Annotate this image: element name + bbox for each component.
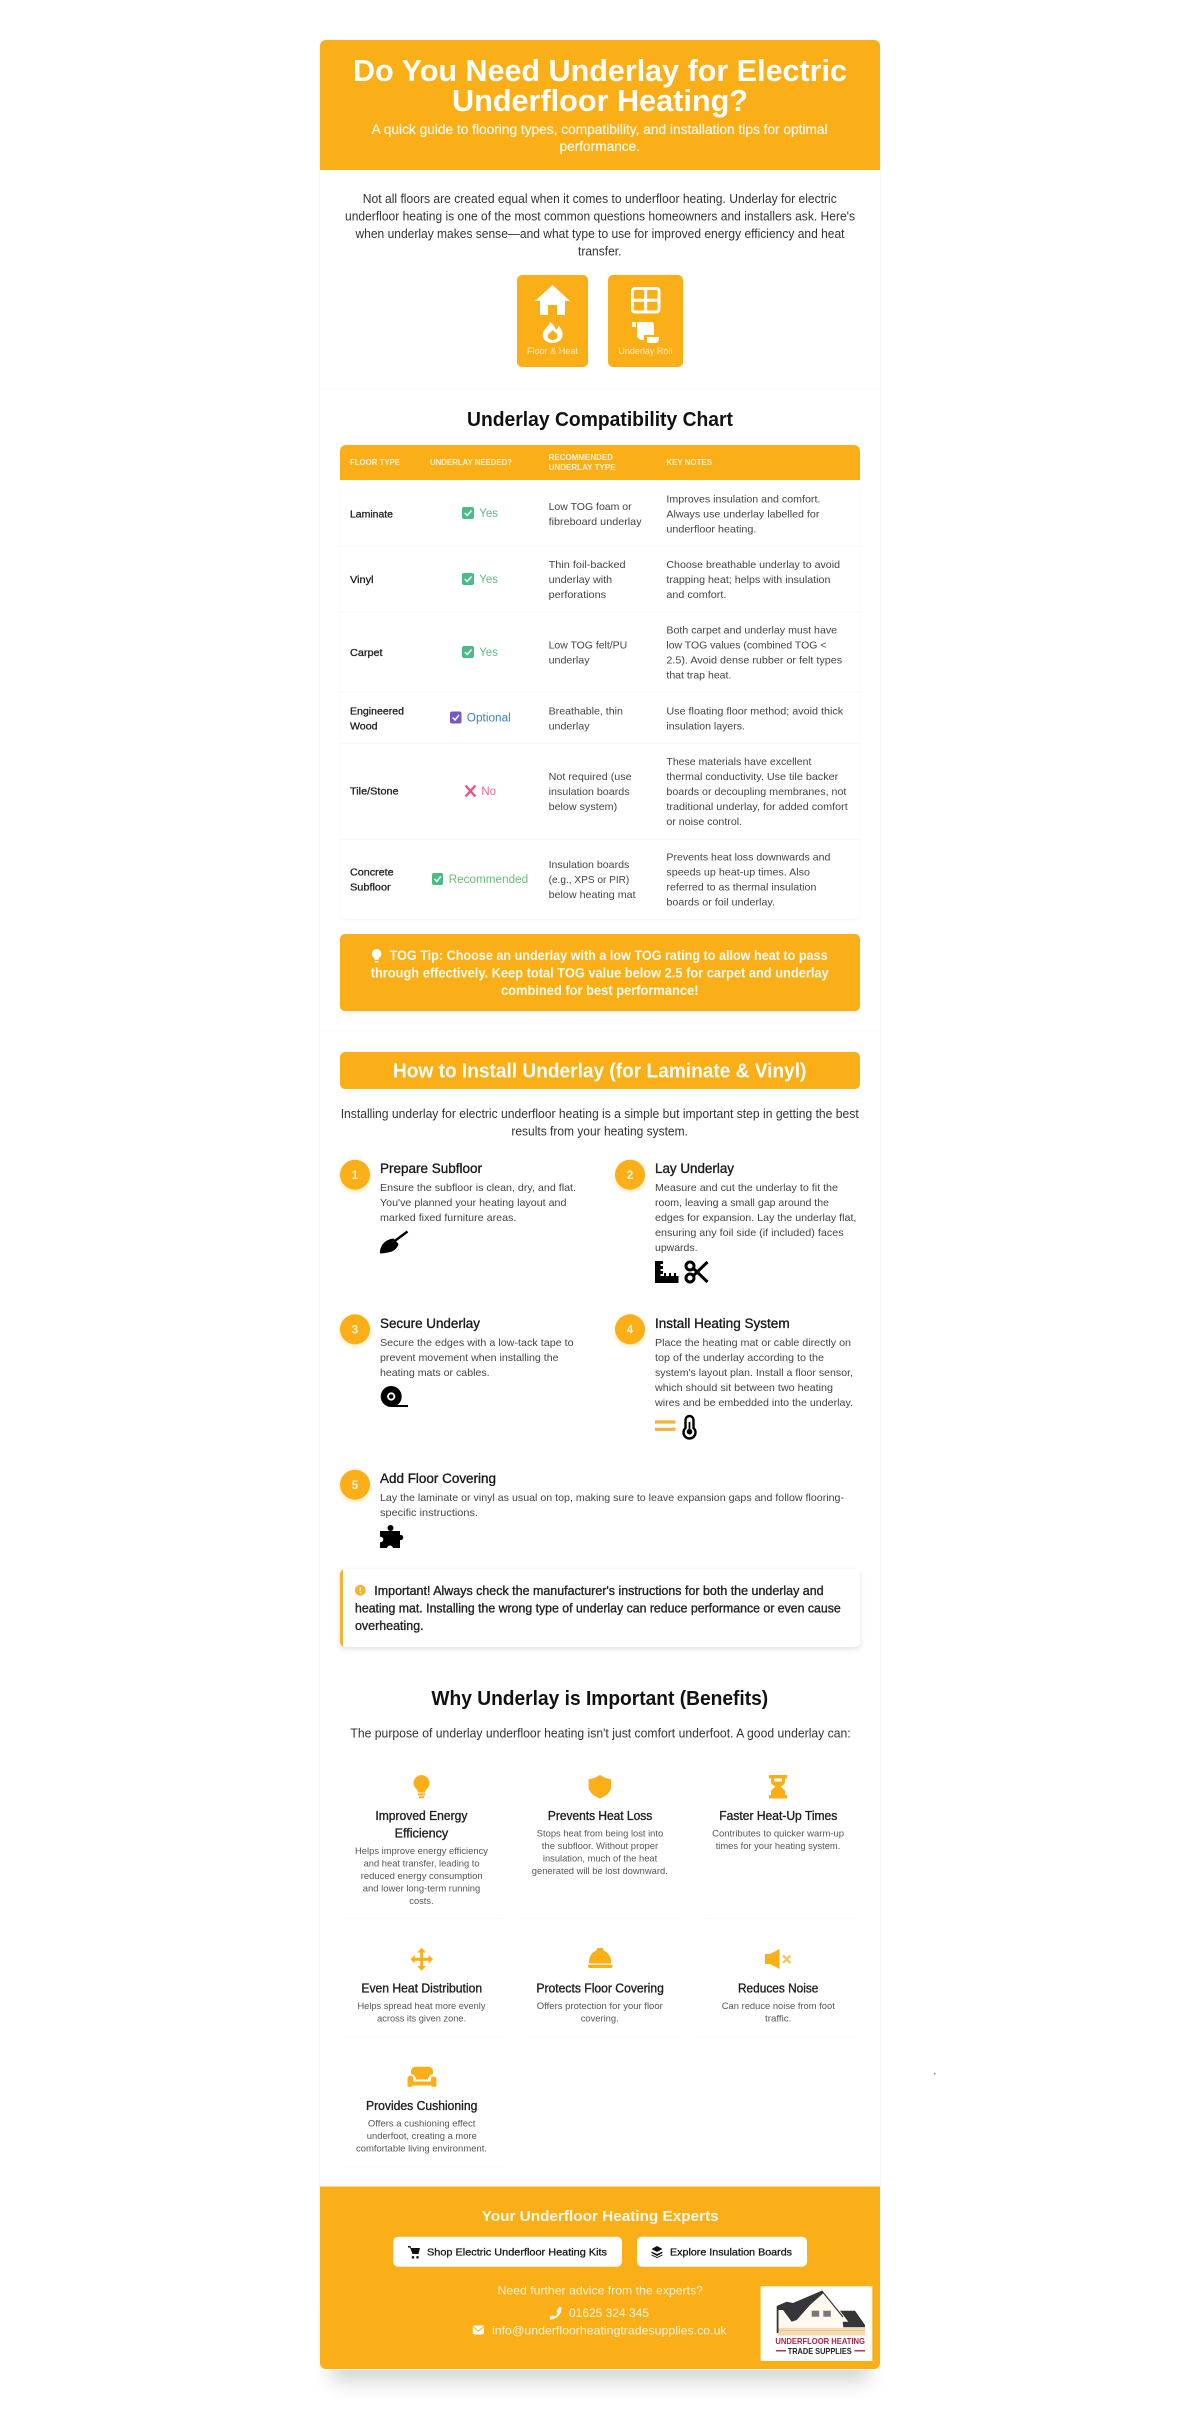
button: shop kits: Shop Electric Underfloor Heating Kits bbox=[427, 2246, 607, 2258]
button: shop kits bbox=[393, 2237, 622, 2267]
row: vinyl: Yes bbox=[479, 574, 498, 586]
icon: cart bbox=[408, 2246, 420, 2259]
row: laminate: Always use underlay labelled for bbox=[666, 509, 820, 521]
step 2: lay underlay bbox=[615, 1160, 856, 1283]
table header: FLOOR TYPE bbox=[350, 458, 401, 467]
step 2: lay underlay: Measure and cut the underlay to fit the bbox=[655, 1182, 838, 1194]
step 4: install heating system: top of the underlay according to the bbox=[655, 1352, 824, 1364]
heading: benefits: Why Underlay is Important (Benefits) bbox=[431, 1687, 768, 1710]
step 5: add floor covering bbox=[340, 1470, 845, 1552]
benefit: reduces noise: Reduces Noise bbox=[738, 1981, 818, 1995]
row: concrete subfloor bbox=[350, 851, 831, 908]
table header: UNDERLAY TYPE bbox=[549, 463, 616, 472]
icon: puzzle bbox=[378, 1525, 403, 1552]
row: tile and stone: Not required (use bbox=[549, 771, 632, 783]
benefit: even heat distribution: across its given zone. bbox=[377, 2013, 466, 2024]
row: concrete subfloor: Insulation boards bbox=[549, 859, 629, 871]
step 2: lay underlay: upwards. bbox=[655, 1242, 698, 1254]
step 2: lay underlay: Lay Underlay bbox=[655, 1161, 734, 1176]
table header: RECOMMENDED bbox=[549, 453, 613, 462]
important text: heating mat. Installing the wrong type of underlay can reduce performance or even cause bbox=[355, 1600, 841, 1616]
intro paragraph: underfloor heating is one of the most common questions homeowners and installers ask. Here's bbox=[345, 208, 855, 224]
row: vinyl: Choose breathable underlay to avoid bbox=[666, 559, 840, 571]
benefit: reduces noise: traffic. bbox=[765, 2013, 791, 2024]
icon: thermometer bbox=[684, 1416, 696, 1438]
install intro text bbox=[341, 1106, 859, 1138]
icon: bulb bbox=[414, 1775, 429, 1798]
TOG tip text: combined for best performance! bbox=[501, 983, 698, 998]
icon: scissors bbox=[686, 1262, 708, 1282]
benefit: improved energy efficiency: and lower long-term running bbox=[363, 1884, 480, 1895]
benefit: improved energy efficiency: costs. bbox=[409, 1896, 434, 1907]
row: laminate: Improves insulation and comfort. bbox=[666, 494, 820, 506]
intro paragraph: transfer. bbox=[578, 244, 622, 258]
header banner bbox=[320, 40, 880, 170]
benefit: faster heat-up times bbox=[712, 1775, 844, 1852]
step 4: install heating system: Install Heating System bbox=[655, 1316, 790, 1331]
title bbox=[353, 53, 847, 118]
step 4: install heating system: wires and be embedded into the underlay. bbox=[654, 1397, 853, 1409]
row: engineered wood: Use floating floor method; avoid thick bbox=[666, 705, 844, 717]
step 4: install heating system: Place the heating mat or cable directly on bbox=[655, 1337, 851, 1349]
step 5: add floor covering: Lay the laminate or vinyl as usual on top, making sure to leave expansion gaps and follow flooring- bbox=[380, 1492, 845, 1504]
row: laminate: Yes bbox=[479, 508, 498, 520]
step 3: secure underlay bbox=[340, 1314, 574, 1407]
benefit: provides cushioning bbox=[356, 2067, 487, 2155]
step 1: prepare subfloor: You've planned your heating layout and bbox=[380, 1197, 567, 1209]
row: engineered wood: underlay bbox=[549, 720, 590, 732]
benefit: provides cushioning: underfoot, creating a more bbox=[367, 2131, 477, 2142]
step 1: prepare subfloor: Ensure the subfloor is clean, dry, and flat. bbox=[380, 1182, 576, 1194]
row: vinyl: underlay with bbox=[549, 574, 612, 586]
icon: bulb bbox=[372, 949, 381, 963]
icon: grid bbox=[632, 288, 659, 312]
TOG tip text: TOG Tip: Choose an underlay with a low TOG rating to allow heat to pass bbox=[390, 948, 828, 963]
button: insulation boards: Explore Insulation Boards bbox=[670, 2246, 792, 2258]
step 1: prepare subfloor bbox=[340, 1160, 576, 1254]
benefit: protects floor covering: Protects Floor Covering bbox=[536, 1981, 664, 1995]
row: tile and stone: thermal conductivity. Use tile backer bbox=[666, 771, 839, 783]
benefit: provides cushioning: Provides Cushioning bbox=[366, 2099, 477, 2113]
row: concrete subfloor: referred to as thermal insulation bbox=[666, 881, 817, 893]
icon: ruler bbox=[655, 1261, 678, 1283]
benefit: even heat distribution: Helps spread heat more evenly bbox=[358, 2001, 486, 2012]
row: tile and stone: No bbox=[481, 786, 496, 798]
logo: UNDERFLOOR HEATING bbox=[775, 2337, 865, 2346]
benefit: improved energy efficiency: Efficiency bbox=[395, 1826, 449, 1840]
row: vinyl: trapping heat; helps with insulation bbox=[666, 574, 831, 586]
step 3: secure underlay: Secure the edges with a low-tack tape to bbox=[380, 1337, 574, 1349]
row: carpet bbox=[350, 625, 842, 682]
step 1: prepare subfloor: Prepare Subfloor bbox=[380, 1161, 483, 1176]
icon: house bbox=[535, 285, 570, 315]
row: laminate: Low TOG foam or bbox=[549, 501, 632, 513]
heading: compatibility chart: Underlay Compatibility Chart bbox=[467, 409, 733, 431]
row: concrete subfloor: below heating mat bbox=[549, 889, 636, 901]
step 5: add floor covering: 5 bbox=[352, 1480, 359, 1492]
icon: hard hat bbox=[588, 1948, 612, 1968]
row: concrete subfloor: Prevents heat loss downwards and bbox=[666, 851, 831, 863]
benefit: improved energy efficiency bbox=[355, 1775, 488, 1907]
row: engineered wood: insulation layers. bbox=[666, 720, 745, 732]
TOG tip text bbox=[371, 948, 829, 998]
important text: Important! Always check the manufacturer's instructions for both the underlay and bbox=[374, 1583, 824, 1598]
heading banner: how to install bbox=[340, 1052, 860, 1089]
subtitle bbox=[372, 122, 828, 154]
benefit: prevents heat loss: generated will be lost downward. bbox=[532, 1866, 668, 1877]
footer bbox=[320, 2186, 880, 2369]
row: carpet: Carpet bbox=[350, 647, 383, 659]
benefit: provides cushioning: Offers a cushioning effect bbox=[368, 2118, 476, 2129]
row: tile and stone: These materials have excellent bbox=[666, 756, 811, 768]
table header: UNDERLAY NEEDED? bbox=[430, 458, 512, 467]
important text bbox=[355, 1583, 841, 1633]
step 2: lay underlay: ensuring any foil side (if included) faces bbox=[655, 1227, 844, 1239]
row: carpet: that trap heat. bbox=[666, 670, 731, 682]
title: Do You Need Underlay for Electric bbox=[353, 53, 847, 88]
advice text: Need further advice from the experts? bbox=[498, 2283, 703, 2297]
compatibility table bbox=[340, 445, 860, 919]
icon: hourglass bbox=[769, 1775, 787, 1798]
benefit: reduces noise: Can reduce noise from foot bbox=[722, 2001, 835, 2012]
callout: important notice bbox=[340, 1569, 860, 1647]
label: floor and heat: Floor & Heat bbox=[527, 346, 579, 356]
row: tile and stone: boards or decoupling membranes, not bbox=[666, 786, 846, 798]
contact: phone: 01625 324 345 bbox=[569, 2306, 649, 2320]
row: tile and stone: insulation boards bbox=[549, 786, 630, 798]
heading banner: how to install: How to Install Underlay (for Laminate & Vinyl) bbox=[393, 1060, 806, 1082]
row: vinyl: Vinyl bbox=[350, 574, 374, 586]
benefit: prevents heat loss: Stops heat from being lost into bbox=[537, 1828, 663, 1839]
row: laminate: underfloor heating. bbox=[666, 524, 756, 536]
row: carpet: low TOG values (combined TOG < bbox=[666, 640, 826, 652]
step 4: install heating system: system's layout plan. Install a floor sensor, bbox=[655, 1367, 853, 1379]
row: concrete subfloor: boards or foil underlay. bbox=[666, 896, 775, 908]
logo bbox=[761, 2286, 872, 2361]
step 4: install heating system bbox=[615, 1314, 853, 1438]
step 1: prepare subfloor: marked fixed furniture areas. bbox=[380, 1212, 516, 1224]
label: underlay roll: Underlay Roll bbox=[618, 346, 672, 356]
benefit: improved energy efficiency: Helps improve energy efficiency bbox=[355, 1846, 488, 1857]
button: insulation boards bbox=[637, 2237, 807, 2267]
step 3: secure underlay: Secure Underlay bbox=[380, 1316, 480, 1331]
benefit: improved energy efficiency: Improved Energy bbox=[375, 1809, 468, 1823]
benefit: improved energy efficiency: and heat transfer, leading to bbox=[364, 1859, 480, 1870]
icon: tape roll bbox=[381, 1386, 408, 1407]
step 5: add floor covering: specific instructions. bbox=[380, 1507, 478, 1519]
benefit: provides cushioning: comfortable living environment. bbox=[356, 2144, 487, 2155]
TOG tip text: through effectively. Keep total TOG value below 2.5 for carpet and underlay bbox=[371, 966, 829, 980]
row: concrete subfloor: Subfloor bbox=[350, 881, 391, 893]
intro paragraph: when underlay makes sense—and what type to use for improved energy efficiency and heat bbox=[355, 226, 845, 241]
step 2: lay underlay: room, leaving a small gap around the bbox=[655, 1197, 829, 1209]
benefit: protects floor covering: Offers protection for your floor bbox=[537, 2001, 663, 2012]
icon: shield bbox=[589, 1775, 611, 1798]
row: vinyl bbox=[350, 559, 840, 601]
step 1: prepare subfloor: 1 bbox=[352, 1170, 359, 1182]
subtitle: performance. bbox=[560, 139, 640, 154]
row: engineered wood: Breathable, thin bbox=[549, 705, 623, 717]
step 2: lay underlay: 2 bbox=[627, 1170, 633, 1182]
row: concrete subfloor: (e.g., XPS or PIR) bbox=[549, 874, 629, 886]
step 2: lay underlay: edges for expansion. Lay the underlay flat, bbox=[655, 1212, 856, 1224]
benefit: even heat distribution bbox=[358, 1948, 486, 2024]
row: carpet: Low TOG felt/PU bbox=[549, 640, 627, 652]
row: tile and stone: traditional underlay, for added comfort bbox=[666, 801, 848, 813]
table header: KEY NOTES bbox=[666, 458, 713, 467]
icon: broom bbox=[380, 1232, 408, 1254]
benefit: protects floor covering bbox=[536, 1948, 664, 2024]
title: Underfloor Heating? bbox=[452, 83, 748, 118]
row: laminate: Laminate bbox=[350, 508, 393, 520]
benefit: improved energy efficiency: reduced energy consumption bbox=[361, 1871, 483, 1882]
row: vinyl: perforations bbox=[549, 589, 606, 601]
benefit: faster heat-up times: Faster Heat-Up Times bbox=[719, 1809, 837, 1823]
icon: exclamation circle bbox=[355, 1585, 366, 1596]
benefit: faster heat-up times: times for your heating system. bbox=[716, 1841, 840, 1852]
row: engineered wood bbox=[350, 705, 844, 732]
step 5: add floor covering: Add Floor Covering bbox=[380, 1471, 496, 1486]
icon: heating wires bbox=[655, 1422, 676, 1429]
row: carpet: underlay bbox=[549, 655, 590, 667]
benefit: prevents heat loss: Prevents Heat Loss bbox=[548, 1809, 652, 1823]
row: vinyl: and comfort. bbox=[666, 589, 726, 601]
icon card: floor and heat bbox=[517, 275, 588, 367]
icon: move arrows bbox=[410, 1948, 433, 1971]
intro paragraph bbox=[345, 191, 855, 258]
benefit: prevents heat loss: the subfloor. Without proper bbox=[542, 1841, 658, 1852]
icon: flame bbox=[543, 322, 563, 343]
row: tile and stone: below system) bbox=[549, 801, 617, 813]
row: concrete subfloor: Recommended bbox=[449, 874, 528, 886]
step 3: secure underlay: 3 bbox=[352, 1325, 358, 1337]
install intro text: results from your heating system. bbox=[511, 1124, 688, 1138]
benefit: faster heat-up times: Contributes to quicker warm-up bbox=[712, 1828, 844, 1839]
icon: couch bbox=[408, 2067, 436, 2087]
table header bbox=[340, 445, 860, 480]
step 3: secure underlay: heating mats or cables. bbox=[380, 1367, 490, 1379]
benefit: protects floor covering: covering. bbox=[581, 2013, 619, 2024]
contact: email: info@underfloorheatingtradesupplies.co.uk bbox=[492, 2324, 728, 2338]
benefit: even heat distribution: Even Heat Distribution bbox=[361, 1981, 482, 1995]
row: tile and stone: Tile/Stone bbox=[350, 786, 399, 798]
row: carpet: Yes bbox=[479, 647, 498, 659]
install intro text: Installing underlay for electric underfloor heating is a simple but important step in getting the best bbox=[341, 1106, 859, 1121]
icon: scroll bbox=[632, 322, 659, 343]
row: concrete subfloor: speeds up heat-up times. Also bbox=[666, 866, 810, 878]
row: engineered wood: Engineered bbox=[350, 705, 404, 717]
step 4: install heating system: which should sit between two heating bbox=[654, 1382, 833, 1394]
row: laminate bbox=[350, 494, 820, 536]
row: tile and stone bbox=[350, 756, 848, 828]
important text: overheating. bbox=[355, 1618, 424, 1633]
row: vinyl: Thin foil-backed bbox=[549, 559, 626, 571]
row: engineered wood: Optional bbox=[467, 713, 511, 725]
row: carpet: 2.5). Avoid dense rubber or felt types bbox=[666, 655, 842, 667]
intro paragraph: Not all floors are created equal when it comes to underfloor heating. Underlay for electric bbox=[363, 191, 837, 206]
benefit: reduces noise bbox=[722, 1949, 835, 2024]
row: carpet: Both carpet and underlay must have bbox=[666, 625, 837, 637]
step 3: secure underlay: prevent movement when installing the bbox=[380, 1352, 559, 1364]
icon card: underlay roll bbox=[608, 275, 683, 367]
footer heading: Your Underfloor Heating Experts bbox=[482, 2208, 719, 2225]
row: concrete subfloor: Concrete bbox=[350, 866, 394, 878]
row: tile and stone: or noise control. bbox=[666, 816, 742, 828]
benefit: prevents heat loss bbox=[532, 1775, 668, 1877]
logo: TRADE SUPPLIES bbox=[788, 2347, 852, 2356]
benefit: prevents heat loss: insulation, much of the heat bbox=[543, 1854, 658, 1865]
icon: layers bbox=[652, 2246, 662, 2258]
callout: TOG tip bbox=[340, 934, 860, 1011]
benefits intro text: The purpose of underlay underfloor heating isn't just comfort underfoot. A good underlay can: bbox=[350, 1726, 851, 1740]
subtitle: A quick guide to flooring types, compatibility, and installation tips for optimal bbox=[372, 122, 828, 137]
icon: muted speaker bbox=[765, 1949, 790, 1969]
row: laminate: fibreboard underlay bbox=[549, 516, 642, 528]
row: engineered wood: Wood bbox=[350, 720, 378, 732]
step 4: install heating system: 4 bbox=[627, 1325, 634, 1337]
